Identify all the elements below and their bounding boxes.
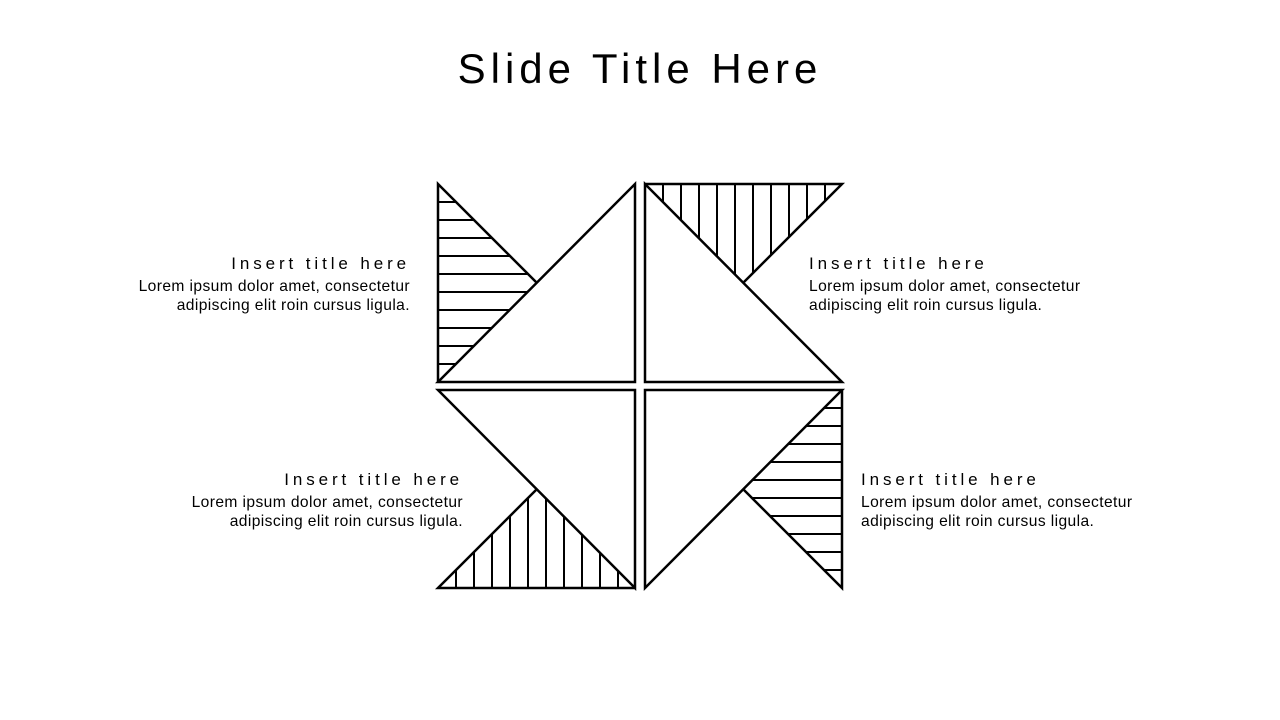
text block bottom-left: adipiscing elit roin cursus ligula. [230, 513, 463, 530]
text block top-right: Lorem ipsum dolor amet, consectetur [809, 278, 1080, 295]
title: Slide Title Here [458, 45, 822, 92]
text block top-left: Insert title here [231, 254, 410, 273]
text block bottom-right [861, 470, 1132, 530]
quadrant top-right [645, 184, 842, 382]
text block top-right [809, 254, 1080, 314]
text block top-left: adipiscing elit roin cursus ligula. [177, 297, 410, 314]
text block top-left: Lorem ipsum dolor amet, consectetur [139, 278, 410, 295]
text block bottom-left: Insert title here [284, 470, 463, 489]
text block top-right: Insert title here [809, 254, 988, 273]
text block bottom-left [192, 470, 463, 530]
text block top-right: adipiscing elit roin cursus ligula. [809, 297, 1042, 314]
quadrant bottom-left [438, 390, 635, 588]
text block bottom-right: Lorem ipsum dolor amet, consectetur [861, 494, 1132, 511]
quadrant bottom-right [645, 390, 842, 588]
text block top-left [139, 254, 410, 314]
text block bottom-left: Lorem ipsum dolor amet, consectetur [192, 494, 463, 511]
text block bottom-right: adipiscing elit roin cursus ligula. [861, 513, 1094, 530]
text block bottom-right: Insert title here [861, 470, 1040, 489]
quadrant top-left [438, 184, 635, 382]
